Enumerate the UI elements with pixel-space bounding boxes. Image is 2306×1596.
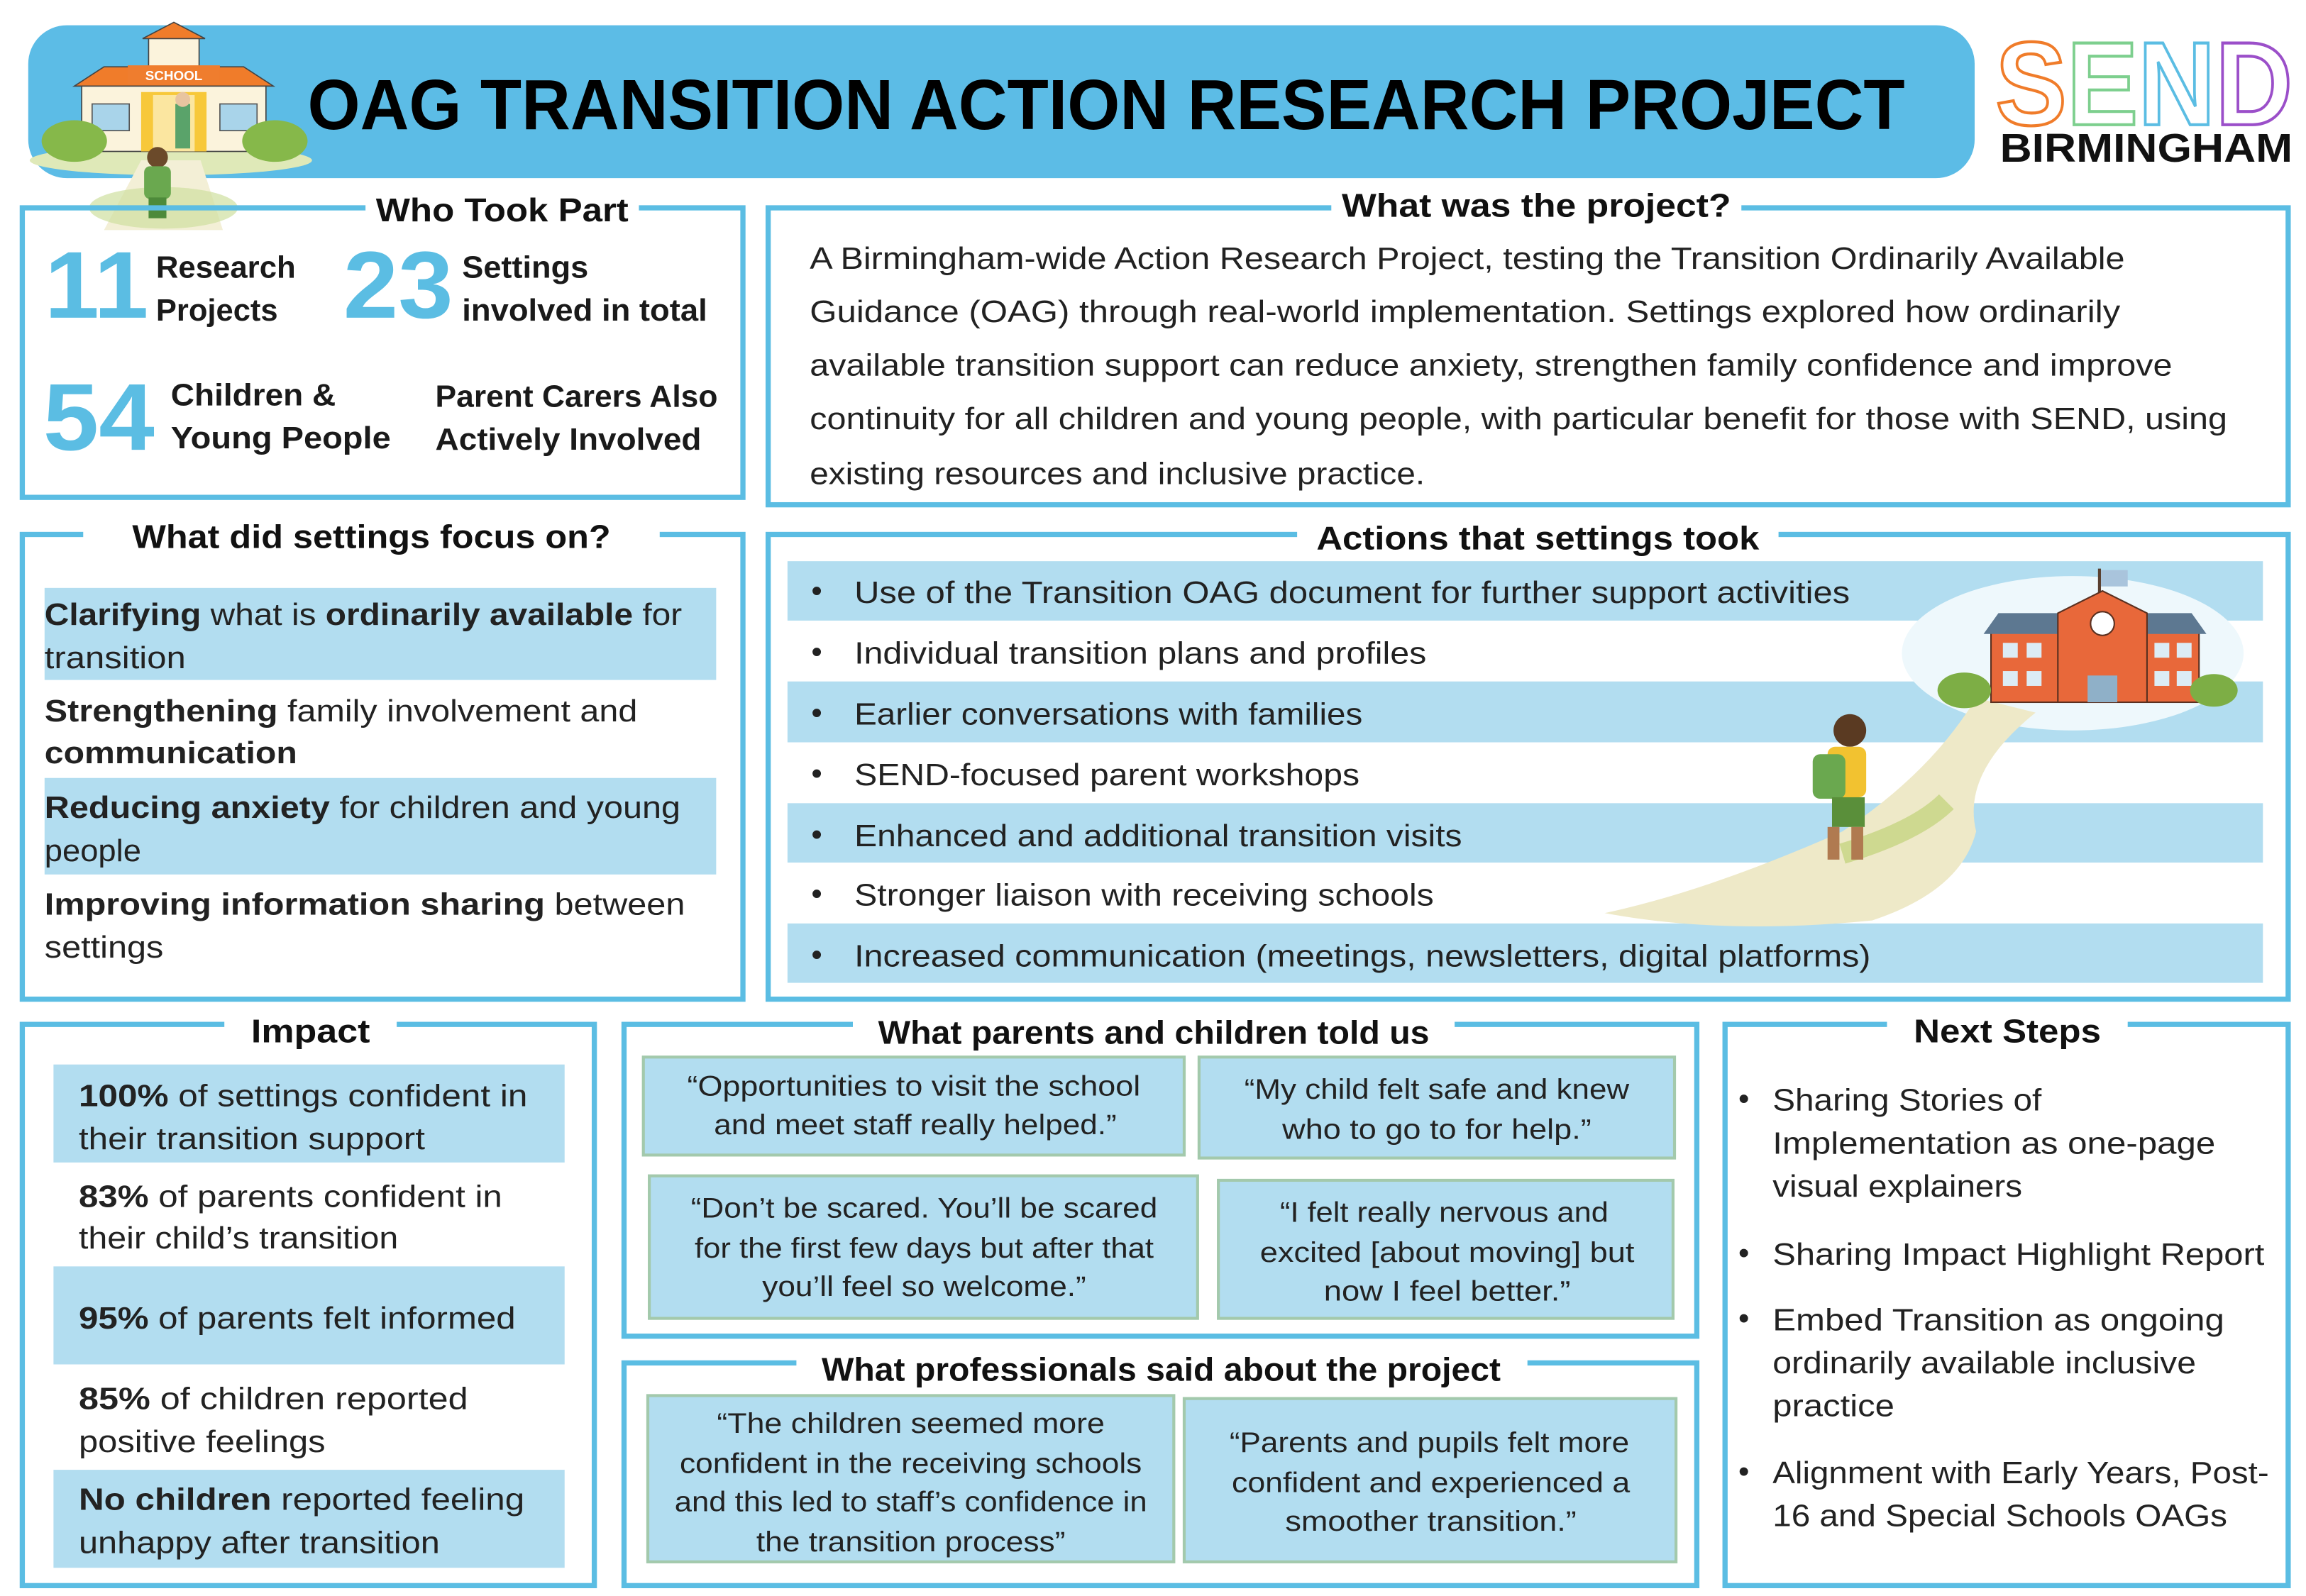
text block: project description: Guidance (OAG) through real-world implementation. Settings explored how ordinarily bbox=[810, 294, 2120, 329]
heading: impact: Impact bbox=[251, 1012, 370, 1049]
focus item: reducing anxiety: people bbox=[45, 833, 141, 868]
stat: 83% parents bbox=[79, 1180, 502, 1256]
focus item: information sharing: Improving information sharing between bbox=[45, 887, 685, 921]
list: actions: • bbox=[811, 817, 822, 852]
heading: next steps: Next Steps bbox=[1914, 1012, 2101, 1049]
quote card: parents and pupils: confident and experienced a bbox=[1232, 1467, 1631, 1498]
list: next steps: Sharing Impact Highlight Report bbox=[1772, 1237, 2264, 1272]
logo: SEND Birmingham: BIRMINGHAM bbox=[2000, 126, 2293, 170]
stat: 100% settings bbox=[79, 1078, 527, 1156]
quote card: children more confident: and this led to staff’s confidence in bbox=[675, 1487, 1147, 1518]
stat: 85% children bbox=[79, 1381, 468, 1459]
list: actions: • bbox=[811, 756, 822, 791]
stat: 83% parents: 83% of parents confident in bbox=[79, 1180, 502, 1214]
stat: no children unhappy: No children reported feeling bbox=[79, 1483, 524, 1517]
quote card: parents and pupils: “Parents and pupils felt more bbox=[1230, 1427, 1629, 1458]
list: next steps: 16 and Special Schools OAGs bbox=[1772, 1499, 2227, 1534]
stat: 11 research projects: Projects bbox=[156, 293, 278, 328]
list: actions: Increased communication (meetings, newsletters, digital platforms) bbox=[854, 939, 1870, 974]
stat: parent carers bbox=[436, 379, 717, 457]
quote card: visit the school: “Opportunities to visit the school bbox=[688, 1071, 1140, 1102]
heading: who took part: Who Took Part bbox=[376, 192, 629, 228]
stat: 100% settings: their transition support bbox=[79, 1121, 425, 1156]
header banner bbox=[28, 26, 1975, 178]
focus item: strengthening: Strengthening family involvement and bbox=[45, 694, 637, 728]
stat: 11 research projects: Research bbox=[156, 250, 296, 284]
heading: focus: What did settings focus on? bbox=[132, 518, 611, 555]
list: next steps: visual explainers bbox=[1772, 1169, 2022, 1204]
stat: 83% parents: their child’s transition bbox=[79, 1221, 398, 1256]
text block: project description: A Birmingham-wide Action Research Project, testing the Transition Ordinarily Available bbox=[810, 241, 2125, 276]
list: actions: • bbox=[811, 937, 822, 972]
list: next steps bbox=[1738, 1081, 2269, 1534]
focus item: information sharing: settings bbox=[45, 930, 163, 965]
quote card: felt nervous: “I felt really nervous and bbox=[1280, 1197, 1609, 1229]
quote card: visit the school: and meet staff really helped.” bbox=[714, 1109, 1117, 1141]
logo: SEND Birmingham: SEND bbox=[1995, 18, 2293, 150]
quote card: felt safe: who to go to for help.” bbox=[1281, 1114, 1591, 1145]
panel: what was the project bbox=[768, 187, 2288, 505]
quote card: children more confident bbox=[648, 1395, 1174, 1562]
list: actions: SEND-focused parent workshops bbox=[854, 758, 1359, 792]
list: actions: • bbox=[811, 877, 822, 911]
list: actions: • bbox=[811, 695, 822, 730]
quote card: don't be scared: “Don’t be scared. You’ll be scared bbox=[691, 1192, 1157, 1224]
list: actions: Enhanced and additional transition visits bbox=[854, 819, 1462, 853]
stat: 100% settings: 100% of settings confident in bbox=[79, 1078, 527, 1113]
stat: 23 settings: 23 bbox=[343, 233, 453, 338]
heading: parents and children: What parents and children told us bbox=[878, 1014, 1429, 1051]
quote card: visit the school bbox=[644, 1057, 1184, 1155]
list: next steps: ordinarily available inclusive bbox=[1772, 1346, 2196, 1380]
stat: 23 settings bbox=[343, 233, 707, 338]
stat: 23 settings: Settings bbox=[462, 250, 588, 284]
quote card: parents and pupils: smoother transition.” bbox=[1285, 1506, 1577, 1537]
focus item: information sharing bbox=[45, 887, 685, 965]
stat: no children unhappy bbox=[79, 1483, 524, 1560]
stat: 85% children: 85% of children reported bbox=[79, 1381, 468, 1416]
panel: what professionals said bbox=[624, 1345, 1697, 1585]
icon: header school illustration: SCHOOL bbox=[145, 68, 202, 83]
quote card: felt nervous bbox=[1218, 1180, 1673, 1319]
stat: parent carers: Parent Carers Also bbox=[436, 379, 717, 414]
list: actions: Individual transition plans and profiles bbox=[854, 636, 1426, 671]
text block: project description bbox=[810, 241, 2227, 491]
text block: project description: available transition support can reduce anxiety, strengthen family confidence and improve bbox=[810, 348, 2173, 383]
panel: what did settings focus on bbox=[22, 516, 743, 999]
list: next steps: • bbox=[1738, 1301, 1749, 1336]
list: next steps: • bbox=[1738, 1081, 1749, 1116]
focus item: clarifying bbox=[45, 597, 682, 675]
list: actions bbox=[811, 574, 1870, 974]
stat: 95% informed: 95% of parents felt informed bbox=[79, 1301, 516, 1336]
quote card: children more confident: “The children seemed more bbox=[717, 1408, 1105, 1439]
panel: next steps bbox=[1725, 1007, 2288, 1585]
text block: project description: continuity for all children and young people, with particular benefit for those with SEND, using bbox=[810, 401, 2227, 436]
icon: school and child illustration bbox=[1605, 569, 2244, 926]
stat: 54 children: 54 bbox=[43, 365, 155, 470]
list: next steps: Embed Transition as ongoing bbox=[1772, 1302, 2224, 1337]
list: next steps: • bbox=[1738, 1454, 1749, 1489]
stat: 11 research projects bbox=[45, 233, 296, 338]
panel: impact bbox=[22, 1007, 595, 1585]
stat: 54 children: Children & bbox=[171, 377, 336, 412]
quote card: parents and pupils bbox=[1184, 1399, 1676, 1562]
focus item: reducing anxiety: Reducing anxiety for children and young bbox=[45, 790, 680, 825]
text block: project description: existing resources and inclusive practice. bbox=[810, 456, 1425, 491]
stat: 54 children: Young People bbox=[171, 421, 391, 455]
list: next steps: Sharing Stories of bbox=[1772, 1083, 2042, 1118]
list: actions: • bbox=[811, 634, 822, 669]
list: next steps: Alignment with Early Years, Post- bbox=[1772, 1456, 2269, 1490]
stat: no children unhappy: unhappy after transition bbox=[79, 1525, 440, 1560]
focus item: strengthening: communication bbox=[45, 736, 297, 770]
list: actions: Use of the Transition OAG document for further support activities bbox=[854, 575, 1850, 610]
heading: professionals: What professionals said about the project bbox=[822, 1351, 1501, 1388]
stat: 23 settings: involved in total bbox=[462, 293, 707, 328]
quote card: don't be scared: you’ll feel so welcome.” bbox=[762, 1271, 1086, 1302]
stat: 54 children bbox=[43, 365, 391, 470]
stat: parent carers: Actively Involved bbox=[436, 422, 701, 457]
title: OAG TRANSITION ACTION RESEARCH PROJECT bbox=[307, 65, 1905, 145]
panel: actions that settings took bbox=[768, 516, 2288, 999]
quote card: felt safe bbox=[1199, 1057, 1675, 1158]
stat: 85% children: positive feelings bbox=[79, 1424, 326, 1459]
quote card: don't be scared: for the first few days but after that bbox=[695, 1233, 1154, 1264]
quote card: children more confident: the transition process” bbox=[756, 1526, 1065, 1558]
panel: who took part bbox=[22, 190, 743, 497]
quote card: felt safe: “My child felt safe and knew bbox=[1245, 1074, 1629, 1105]
quote card: felt nervous: now I feel better.” bbox=[1324, 1275, 1570, 1307]
heading: actions: Actions that settings took bbox=[1316, 519, 1760, 556]
heading: what was the project: What was the project? bbox=[1342, 187, 1731, 224]
list: next steps: practice bbox=[1772, 1389, 1894, 1424]
stat: 11 research projects: 11 bbox=[45, 233, 148, 338]
quote card: felt nervous: excited [about moving] but bbox=[1260, 1237, 1634, 1268]
list: next steps: Implementation as one-page bbox=[1772, 1126, 2215, 1160]
list: actions: Stronger liaison with receiving schools bbox=[854, 878, 1434, 913]
quote card: don't be scared bbox=[649, 1176, 1198, 1319]
focus item: clarifying: Clarifying what is ordinarily available for bbox=[45, 597, 682, 632]
focus item: clarifying: transition bbox=[45, 641, 186, 675]
list: actions: Earlier conversations with families bbox=[854, 697, 1362, 731]
focus item: reducing anxiety bbox=[45, 790, 680, 868]
panel: what parents and children told us bbox=[624, 1007, 1697, 1336]
focus item: strengthening bbox=[45, 694, 637, 770]
quote card: children more confident: confident in the receiving schools bbox=[680, 1448, 1142, 1479]
list: next steps: • bbox=[1738, 1236, 1749, 1270]
list: actions: • bbox=[811, 574, 822, 609]
icon: header school illustration bbox=[30, 22, 312, 230]
